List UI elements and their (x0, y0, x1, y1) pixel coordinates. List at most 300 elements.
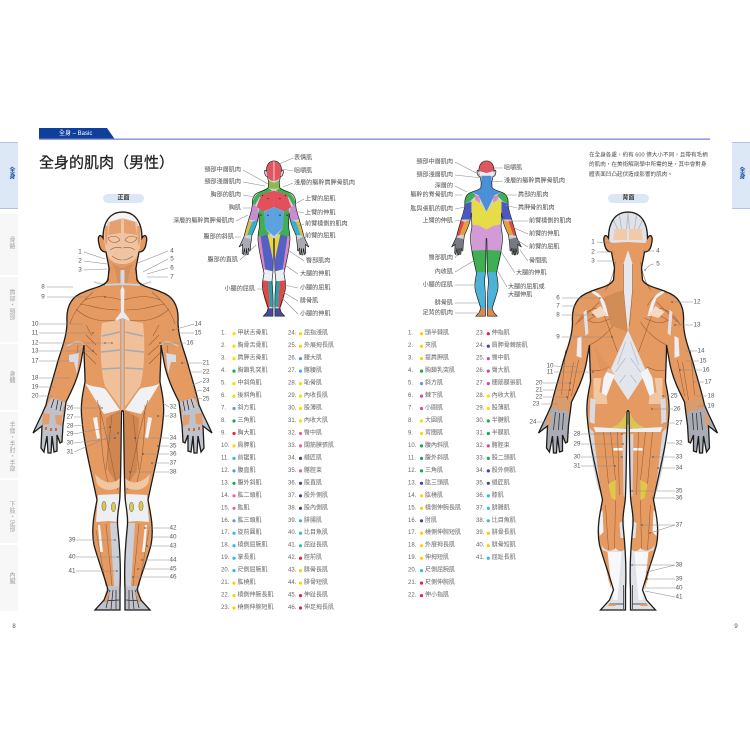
callouts: small back figure: 頸部淺層肌肉 (416, 170, 453, 178)
muscle list: back column 1: 5. (408, 381, 413, 387)
muscle list: back column 2: 25. (476, 356, 485, 362)
muscle list: front column 1: 21. (221, 580, 230, 586)
number callouts: large back figure: 21 (535, 386, 543, 394)
muscle list: back column 2: 23. (476, 331, 485, 337)
callouts: small back figure (410, 158, 572, 316)
muscle list: back column 1: 三角肌 (425, 466, 443, 474)
callouts: small back figure: 足背的肌肉 (423, 308, 453, 316)
number callouts: large back figure: 10 (546, 362, 554, 370)
header bar: 全身 – Basic (59, 129, 92, 137)
header bar (39, 128, 710, 140)
muscle list: back column 1: 10. (408, 443, 417, 449)
pill: front view (103, 194, 144, 203)
number callouts: large front figure: 19 (31, 384, 39, 390)
muscle list: front column 1: 17. (221, 530, 230, 536)
callouts: small front figure: 胸肌 (229, 204, 241, 212)
section tabs: left page: 下肢・足部 (8, 501, 15, 534)
muscle list: front column 2: 37. (288, 493, 297, 499)
muscle list: back column 1: 18. (408, 543, 417, 549)
number callouts: large front figure: 25 (202, 396, 210, 402)
number callouts: large front figure: 34 (169, 434, 177, 442)
intro paragraph: 體表面凹凸起伏造成影響的肌肉。 (589, 170, 673, 178)
muscle list: front column 2: 40. (288, 530, 297, 536)
callouts: small front figure: 大腿的伸肌 (300, 270, 330, 278)
number callouts: large front figure: 32 (169, 404, 177, 410)
muscle list: front column 1: 三角肌 (238, 416, 256, 424)
number callouts: large front figure: 14 (194, 320, 202, 328)
number callouts: large back figure: 12 (693, 298, 701, 306)
number callouts: large front figure: 21 (202, 360, 210, 366)
number callouts: large front figure: 27 (66, 414, 74, 420)
muscle list: back column 1: 肱三頭肌 (425, 478, 449, 486)
callouts: small back figure: 淺層的軀幹肩胛骨肌肉 (504, 176, 565, 184)
muscle list: front column 2: 闊筋膜張肌 (304, 441, 334, 449)
muscle list: back column 2: 臀大肌 (492, 366, 510, 374)
muscle list: back column 1: 2. (408, 343, 413, 349)
muscle list: back column 1: 腹外斜肌 (425, 453, 449, 461)
muscle list: back column 1: 夾肌 (425, 342, 437, 349)
muscle list: front column 1: 腹外斜肌 (238, 478, 262, 486)
muscle list: back column 1: 背闊肌 (425, 428, 443, 436)
callouts: small back figure: 上臂的伸肌 (423, 216, 453, 224)
number callouts: large back figure: 9 (556, 334, 560, 340)
number callouts: large back figure: 1 (591, 238, 595, 246)
muscle list: back column 2: 髂脛束 (492, 441, 510, 449)
muscle list: back column 1: 胸鎖乳突肌 (425, 366, 455, 374)
muscle list: front column 2: 脛前肌 (304, 553, 322, 561)
number callouts: large back figure: 40 (675, 584, 683, 592)
number callouts: large front figure: 33 (169, 412, 177, 420)
muscle list: front column 2: 屈趾長肌 (304, 541, 328, 549)
muscle list: front column 2: 29. (288, 393, 297, 399)
number callouts: large front figure: 43 (169, 542, 177, 550)
muscle list: front column 1: 20. (221, 568, 230, 574)
callouts: small back figure: 咀嚼肌 (504, 164, 522, 172)
muscle list: back column 2: 35. (476, 480, 485, 486)
number callouts: large front figure: 3 (78, 266, 82, 274)
figure: large front muscle body (33, 212, 212, 610)
section tabs: left page (0, 142, 18, 611)
muscle list: front column 1: 橈側伸腕長肌 (238, 591, 274, 599)
muscle list: front column 2: 髂脛束 (304, 466, 322, 474)
muscle list: back column 1: 4. (408, 368, 413, 374)
muscle list: front column 2: 36. (288, 480, 297, 486)
muscle list: back column 2: 股薄肌 (492, 404, 510, 412)
muscle list: front column 2: 32. (288, 430, 297, 436)
callouts: small back figure: 軀幹的脊骨肌肉 (410, 190, 453, 198)
muscle list: front column 1: 胸大肌 (238, 428, 256, 436)
number callouts: large back figure: 35 (675, 488, 683, 494)
muscle list: front column 2: 30. (288, 406, 297, 412)
muscle list: front column 2: 27. (288, 368, 297, 374)
muscle list: back column 2: 33. (476, 455, 485, 461)
muscle list: front column 2: 31. (288, 418, 297, 424)
muscle list: front column 1: 13. (221, 480, 230, 486)
muscle list: back column 1: 伸拇短肌 (425, 553, 449, 561)
callouts: small back figure: 臀部肌肉 (429, 254, 453, 262)
number callouts: large front figure: 31 (66, 448, 74, 456)
section tab: right page: 全身 (738, 167, 745, 179)
muscle list: back column 1: 尺側屈腕肌 (425, 566, 455, 574)
number callouts: large back figure: 6 (556, 294, 560, 302)
muscle list: back column 2: 39. (476, 530, 485, 536)
muscle list: front column 2: 臀中肌 (304, 428, 322, 436)
number callouts: large back figure: 15 (699, 358, 707, 364)
muscle list: front column 2: 46. (288, 605, 297, 611)
number callouts: large front figure: 30 (66, 440, 74, 446)
muscle list: front column 1: 甲狀舌骨肌 (238, 329, 268, 337)
callouts: small back figure: 肩胛骨的肌肉 (518, 204, 555, 212)
number callouts: large front figure: 16 (186, 340, 194, 346)
callouts: small front figure: 頸部淺層肌肉 (204, 178, 241, 186)
muscle list: back column 1: 提肩胛肌 (425, 354, 449, 362)
callouts: small front figure: 頸部中層肌肉 (204, 166, 241, 174)
muscle list: back column 2: 40. (476, 543, 485, 549)
number callouts: large back figure: 8 (556, 312, 560, 318)
number callouts: large front figure: 10 (31, 320, 39, 328)
number callouts: large back figure: 30 (573, 454, 581, 460)
muscle list: back column 2: 伸指肌 (492, 329, 510, 337)
muscle list: front column 1: 2. (221, 343, 226, 349)
number callouts: large front figure: 18 (31, 374, 39, 382)
section tabs: left page: 全身 (8, 167, 15, 179)
muscle list: back column 2: 28. (476, 393, 485, 399)
number callouts: large back figure: 33 (675, 454, 683, 460)
callouts: small front figure: 咀嚼肌 (294, 166, 312, 174)
muscle list: back column 2: 32. (476, 443, 485, 449)
muscle list: back column 2: 26. (476, 368, 485, 374)
number callouts: large front figure: 35 (169, 442, 177, 450)
number callouts: large back figure: 39 (675, 576, 683, 582)
callouts: small front figure: 前臂的屈肌 (305, 232, 335, 240)
number callouts: large back figure: 34 (675, 464, 683, 472)
number callouts: large front figure: 12 (31, 340, 39, 346)
callouts: small back figure: 肱與張肌的肌肉 (410, 204, 453, 212)
callouts: small back figure: 小腿的屈肌 (423, 280, 453, 288)
number callouts: large front figure: 17 (31, 358, 39, 364)
muscle list: front column 2: 33. (288, 443, 297, 449)
number callouts: large back figure: 23 (532, 400, 540, 408)
muscle list: front column 2: 39. (288, 518, 297, 524)
number callouts: large back figure: 3 (591, 258, 595, 264)
intro paragraph: 在全身各處，約有 600 條大小不同，且帶有毛柄 (589, 150, 708, 158)
number callouts: large back figure: 17 (704, 378, 712, 386)
muscle list: back column 2: 30. (476, 418, 485, 424)
muscle list: front column 1: 中斜角肌 (238, 379, 262, 387)
callouts: small back figure: 腓骨肌 (435, 298, 453, 306)
number callouts: large front figure: 23 (202, 378, 210, 384)
muscle list: back column 2: 闊筋膜張肌 (492, 379, 522, 387)
callouts: small front figure: 小腿的屈肌 (300, 284, 330, 292)
number callouts: large back figure: 22 (535, 394, 543, 400)
muscle list: front column 1: 胸鎖乳突肌 (238, 366, 268, 374)
number callouts: large front figure: 46 (169, 574, 177, 580)
muscle list: front column 2: 35. (288, 468, 297, 474)
muscle list: back column 1: 16. (408, 518, 417, 524)
muscle list: front column 2: 24. (288, 331, 297, 337)
number callouts: large back figure: 38 (675, 562, 683, 568)
muscle list: front column 2: 髂腰肌 (304, 366, 322, 374)
muscle list: back column 1: 13. (408, 480, 417, 486)
muscle list: back column 1: 20. (408, 568, 417, 574)
muscle list: front column 2: 比目魚肌 (304, 528, 328, 536)
muscle list: back column 2: 29. (476, 406, 485, 412)
intro paragraph: 的肌肉，在美術解剖學中所需的是，其中會對身 (589, 160, 707, 168)
muscle list: back column 1: 21. (408, 580, 417, 586)
pill: back view (608, 194, 649, 203)
muscle list: front column 1: 8. (221, 418, 226, 424)
number callouts: large front figure: 28 (66, 422, 74, 430)
number callouts: large front figure: 26 (66, 404, 74, 412)
muscle list: back column 1: 7. (408, 406, 413, 412)
callouts: small back figure: 前臂的伸肌 (529, 230, 559, 238)
muscle list: front column 1: 橈側屈腕肌 (238, 541, 268, 549)
muscle list: back column 2: 38. (476, 518, 485, 524)
muscle list: back column 1: 頭半棘肌 (425, 329, 449, 337)
muscle list: back column 2: 腓腸肌 (492, 503, 510, 511)
muscle list: back column 1: 橈側伸腕長肌 (425, 503, 461, 511)
number callouts: large front figure: 45 (169, 566, 177, 572)
muscle list: front column 1: 23. (221, 605, 230, 611)
section tabs: left page: 骨骼 (8, 237, 15, 250)
muscle list: front column 2: 伸足拇長肌 (304, 603, 334, 611)
number callouts: large front figure: 4 (170, 248, 174, 254)
muscle list: front column 1: 7. (221, 406, 226, 412)
number callouts: large front figure: 9 (41, 294, 45, 300)
number callouts: large back figure: 14 (697, 348, 705, 354)
muscle list: back column 1: 外展拇長肌 (425, 541, 455, 549)
muscle list: front column 2: 38. (288, 505, 297, 511)
callouts: small back figure: 頸部中層肌肉 (416, 158, 453, 166)
muscle list: front column 1: 肩胛舌骨肌 (238, 354, 268, 362)
callouts: small front figure: 前臂橈側的肌肉 (305, 220, 348, 228)
number callouts: large back figure: 19 (707, 402, 715, 410)
muscle list: back column 1: 橈側伸腕短肌 (425, 528, 461, 536)
number callouts: large back figure: 37 (675, 522, 683, 528)
muscle list: back column 1: 6. (408, 393, 413, 399)
muscle list: back column 2: 34. (476, 468, 485, 474)
muscle list: back column 1: 腹內斜肌 (425, 441, 449, 449)
muscle list: front column 2 (288, 329, 334, 611)
number callouts: large back figure: 31 (573, 462, 581, 470)
page numbers (12, 624, 738, 630)
muscle list: back column 2: 縫匠肌 (492, 478, 510, 486)
muscle list: front column 2: 內收長肌 (304, 391, 328, 399)
number callouts: large back figure: 29 (573, 440, 581, 448)
number callouts: large front figure: 38 (169, 468, 177, 476)
muscle list: back column 1: 小圓肌 (425, 404, 443, 412)
muscle list: back column 1: 肱橈肌 (425, 491, 443, 499)
muscle list: back column 2: 37. (476, 505, 485, 511)
muscle list: front column 2: 縫匠肌 (304, 453, 322, 461)
muscle list: back column 1: 伸小指肌 (425, 591, 449, 599)
callouts: small back figure: 內收肌 (435, 268, 453, 276)
muscle list: back column 2: 股外側肌 (492, 466, 516, 474)
muscle list: front column 2: 股外側肌 (304, 491, 328, 499)
muscle list: front column 1: 5. (221, 381, 226, 387)
muscle list: front column 2: 腓骨短肌 (304, 578, 328, 586)
muscle list: back column 1: 棘下肌 (425, 391, 443, 399)
callouts: small front figure (173, 154, 355, 318)
callouts: small back figure: 骨間肌 (529, 258, 547, 264)
pill: back view: 背面 (622, 194, 635, 202)
muscle list: back column 2: 腓骨長肌 (492, 528, 516, 536)
muscle list: front column 1: 腹直肌 (238, 466, 256, 474)
callouts: small front figure: 臀部肌肉 (306, 256, 330, 264)
number callouts: large front figure: 41 (68, 568, 76, 574)
muscle list: front column 2: 25. (288, 343, 297, 349)
muscle list: front column 1: 前鋸肌 (238, 453, 256, 461)
muscle list: back column 1: 12. (408, 468, 417, 474)
number callouts: large back figure: 36 (675, 494, 683, 502)
number callouts: large front figure: 13 (31, 348, 39, 354)
muscle list: back column 1: 19. (408, 555, 417, 561)
muscle list: front column 2: 恥骨肌 (304, 379, 322, 387)
number callouts: large back figure: 18 (707, 392, 715, 400)
muscle list: back column 2: 41. (476, 555, 485, 561)
muscle list: front column 1: 12. (221, 468, 230, 474)
number callouts: large front figure: 2 (78, 258, 82, 264)
muscle list: front column 2: 外展拇長肌 (304, 341, 334, 349)
callouts: small front figure: 上臂的伸肌 (305, 208, 335, 216)
muscle list: front column 1: 掌長肌 (238, 553, 256, 561)
muscle list: front column 2: 屈指淺肌 (304, 329, 328, 337)
number callouts: large back figure: 41 (675, 594, 683, 600)
callouts: small front figure: 腓骨肌 (300, 296, 318, 304)
muscle list: back column 2: 內收大肌 (492, 391, 516, 399)
callouts: small back figure: 深層的 (435, 182, 453, 190)
muscle list: back column 1: 15. (408, 505, 417, 511)
muscle list: front column 2: 股薄肌 (304, 404, 322, 412)
number callouts: large front figure: 20 (31, 392, 39, 400)
callouts: small back figure: 肩部的肌肉 (518, 190, 548, 198)
number callouts: large front figure: 40 (68, 554, 76, 560)
muscle list: back column 1: 8. (408, 418, 413, 424)
muscle list: front column 1: 胸骨舌骨肌 (238, 341, 268, 349)
number callouts: large front figure: 42 (169, 524, 177, 532)
number callouts: large back figure (529, 238, 715, 600)
figure: small colour-coded back body (452, 161, 521, 316)
muscle list: front column 2: 腰大肌 (304, 354, 322, 362)
muscle list: back column 2: 27. (476, 381, 485, 387)
muscle list: front column 2: 伸趾長肌 (304, 591, 328, 599)
muscle list: front column 2: 腓骨長肌 (304, 566, 328, 574)
muscle list: front column 1: 6. (221, 393, 226, 399)
muscle list: back column 1: 22. (408, 593, 417, 599)
muscle list: back column 1: 肘肌 (425, 516, 437, 524)
number callouts: large front figure: 22 (202, 368, 210, 376)
muscle list: back column 1: 14. (408, 493, 417, 499)
number callouts: large back figure: 32 (675, 440, 683, 446)
figure: large back muscle body (538, 212, 718, 610)
pill: front view: 正面 (117, 194, 130, 202)
muscle list: front column 1: 肱二頭肌 (238, 491, 262, 499)
muscle list: front column 1: 橈側伸腕短肌 (238, 603, 274, 611)
muscle list: front column 1: 後斜角肌 (238, 391, 262, 399)
muscle list: back column 1: 斜方肌 (425, 379, 443, 387)
muscle list: back column 1: 11. (408, 455, 416, 461)
muscle list: front column 1: 10. (221, 443, 230, 449)
muscle list: front column 2: 34. (288, 455, 297, 461)
callouts: small front figure: 腹部的斜肌 (204, 232, 234, 240)
callouts: small back figure: 大腿伸肌 (508, 290, 532, 298)
muscle list: front column 2: 股直肌 (304, 478, 322, 486)
intro paragraph (589, 150, 708, 178)
section tabs: left page: 身體 (8, 370, 15, 384)
number callouts: large front figure: 36 (169, 450, 177, 458)
muscle list: front column 2: 44. (288, 580, 297, 586)
callouts: small front figure: 表情肌 (294, 154, 312, 162)
number callouts: large front figure: 5 (170, 256, 174, 262)
muscle list: front column 1: 尺側屈腕肌 (238, 566, 268, 574)
muscle list: back column 1: 尺側伸腕肌 (425, 578, 455, 586)
number callouts: large front figure: 44 (169, 556, 177, 564)
muscle list: front column 1: 3. (221, 356, 226, 362)
number callouts: large front figure: 40 (169, 534, 177, 540)
muscle list: front column 2: 42. (288, 555, 297, 561)
number callouts: large front figure: 1 (78, 248, 82, 256)
muscle list: front column 2: 45. (288, 593, 297, 599)
section tabs: left page: 手臂・手肘・手部 (8, 421, 15, 473)
callouts: small front figure: 胸部的肌肉 (211, 190, 241, 198)
number callouts: large front figure: 15 (194, 330, 202, 336)
page numbers: 9 (734, 624, 738, 630)
muscle list: back column 1: 9. (408, 430, 413, 436)
number callouts: large front figure: 7 (170, 274, 174, 280)
number callouts: large front figure: 8 (41, 284, 45, 290)
number callouts: large back figure: 7 (556, 302, 560, 310)
number callouts: large front figure (31, 248, 210, 580)
number callouts: large front figure: 29 (66, 430, 74, 438)
number callouts: large back figure: 13 (693, 322, 701, 328)
muscle list: front column 2: 內收大肌 (304, 416, 328, 424)
muscle list: back column 2: 31. (476, 430, 485, 436)
number callouts: large back figure: 5 (656, 260, 660, 268)
callouts: small front figure: 腹部的直肌 (208, 256, 238, 264)
muscle list: front column 1: 19. (221, 555, 230, 561)
muscle list: back column 2: 腓骨短肌 (492, 541, 516, 549)
muscle list: front column 1: 旋前圓肌 (238, 528, 262, 536)
muscle list: back column 2: 24. (476, 343, 485, 349)
muscle list: back column 1: 3. (408, 356, 413, 362)
section tabs: left page: 內臟 (8, 572, 15, 585)
number callouts: large back figure: 28 (573, 430, 581, 438)
callouts: small front figure: 淺層的軀幹肩胛骨肌肉 (294, 178, 355, 186)
muscle list: front column 1: 18. (221, 543, 230, 549)
number callouts: large back figure: 26 (673, 406, 681, 412)
muscle list: back column 1: 17. (408, 530, 417, 536)
muscle list: back column 2: 半腱肌 (492, 416, 510, 424)
callouts: small back figure: 大腿的伸肌 (516, 268, 546, 276)
muscle list: front column 1: 11. (221, 455, 229, 461)
muscle list: front column 1: 16. (221, 518, 230, 524)
number callouts: large front figure: 11 (32, 330, 39, 336)
muscle list: front column 1: 肱肌 (238, 503, 250, 511)
number callouts: large front figure: 39 (68, 536, 76, 544)
muscle list: front column 1: 肱橈肌 (238, 578, 256, 586)
muscle list: front column 1: 4. (221, 368, 226, 374)
callouts: small back figure: 大腿的屈肌或 (508, 282, 545, 290)
callouts: small front figure: 深層的軀幹肩胛骨肌肉 (173, 216, 234, 224)
number callouts: large back figure: 25 (670, 392, 678, 400)
callouts: small front figure: 小腿的伸肌 (300, 310, 330, 318)
number callouts: large back figure: 24 (529, 418, 537, 426)
muscle list: front column 1: 斜方肌 (238, 404, 256, 412)
muscle list: back column 1 (408, 329, 461, 599)
callouts: small back figure: 前臂的屈肌 (529, 242, 559, 250)
number callouts: large back figure: 16 (702, 366, 710, 374)
section tabs: left page: 肩部・頸部 (8, 289, 15, 322)
